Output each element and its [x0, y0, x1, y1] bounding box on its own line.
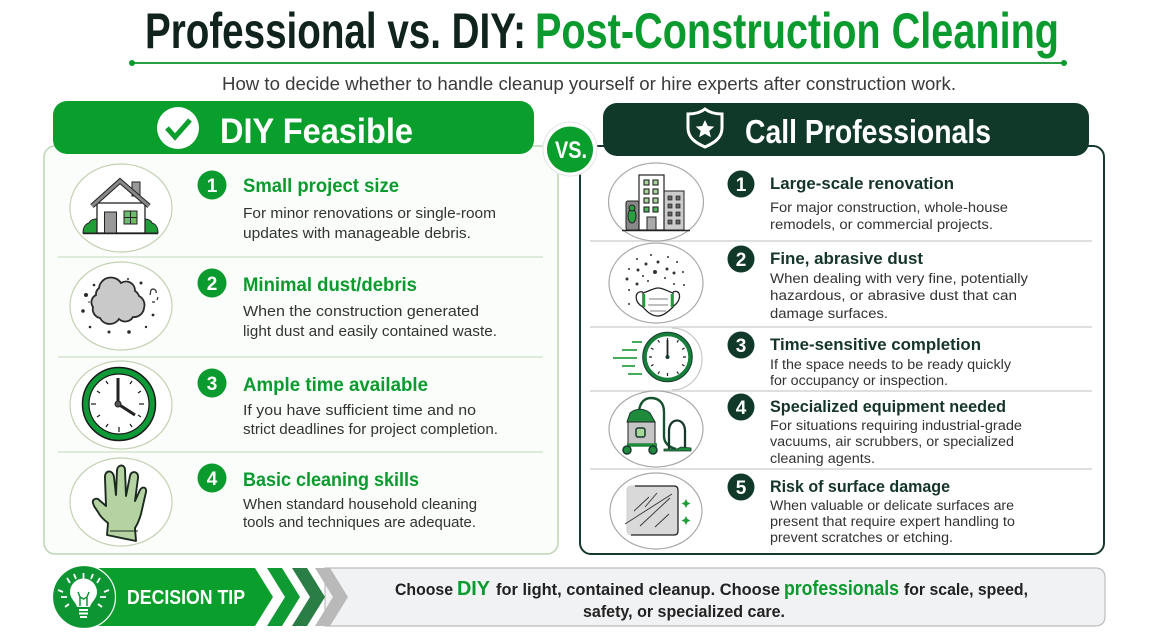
item 3: for occupancy or inspection.	[770, 373, 948, 388]
icon: buildings	[608, 163, 704, 241]
professionals header: Call Professionals	[745, 113, 991, 150]
item 3: 3	[207, 374, 217, 395]
VS badge	[543, 122, 597, 176]
icon: fast clock	[613, 328, 702, 390]
icon: vacuum	[609, 391, 703, 467]
title: Professional vs. DIY:	[145, 3, 526, 59]
item 3: Time-sensitive completion	[770, 335, 981, 354]
tip text: professionals	[784, 578, 899, 600]
icon: house	[70, 164, 172, 252]
icon: scratched surface	[610, 473, 702, 549]
item 5: Risk of surface damage	[770, 477, 950, 496]
item 3: If the space needs to be ready quickly	[770, 357, 1011, 372]
item 1	[198, 170, 496, 242]
icon: mask and dust	[609, 243, 703, 323]
DIY header: DIY Feasible	[220, 112, 413, 151]
decision tip bar	[52, 566, 1105, 628]
item 2: Fine, abrasive dust	[770, 249, 923, 268]
item 1: Small project size	[243, 176, 399, 197]
panel: call professionals	[580, 103, 1104, 554]
tip text: safety, or specialized care.	[583, 602, 785, 621]
item 3: If you have sufficient time and no	[243, 403, 476, 419]
item 4: Basic cleaning skills	[243, 470, 419, 491]
tip text: DIY	[457, 578, 491, 600]
item 5: prevent scratches or etching.	[770, 530, 953, 545]
item 5: When valuable or delicate surfaces are	[770, 498, 1014, 513]
item 4	[198, 464, 477, 531]
title underline	[129, 60, 1067, 66]
professionals header	[603, 103, 1089, 156]
item 2: When dealing with very fine, potentially	[770, 271, 1028, 286]
item 1: For major construction, whole-house	[770, 200, 1008, 215]
item 4: 4	[207, 469, 218, 490]
tip text: Choose	[395, 580, 453, 599]
item 1: 1	[736, 175, 747, 196]
item 1: Large-scale renovation	[770, 174, 954, 193]
item 5	[728, 474, 1015, 545]
item 1	[728, 170, 1008, 232]
icon: clock	[70, 361, 172, 449]
item 2	[728, 246, 1028, 321]
tip text: for scale, speed,	[904, 580, 1028, 599]
item 1: 1	[207, 176, 218, 197]
icon: light bulb	[52, 566, 116, 628]
tip text: for light, contained cleanup. Choose	[496, 580, 780, 599]
tip banner	[90, 568, 348, 626]
item 4: vacuums, air scrubbers, or specialized	[770, 434, 1014, 449]
item 4: cleaning agents.	[770, 451, 875, 466]
item 1: remodels, or commercial projects.	[770, 217, 993, 232]
item 2: 2	[736, 250, 746, 271]
item 2: light dust and easily contained waste.	[243, 324, 497, 340]
subtitle: How to decide whether to handle cleanup yourself or hire experts after construction work.	[222, 74, 956, 94]
icon: dust cloud	[70, 262, 172, 350]
panel: DIY feasible	[44, 101, 558, 554]
item 3: strict deadlines for project completion.	[243, 422, 498, 438]
item 2: When the construction generated	[243, 304, 479, 320]
item 5: present that require expert handling to	[770, 514, 1015, 529]
item 4: 4	[736, 398, 747, 419]
item 3: Ample time available	[243, 375, 428, 396]
item 2: damage surfaces.	[770, 306, 888, 321]
item 5: 5	[736, 478, 747, 499]
item 4: tools and techniques are adequate.	[243, 515, 476, 531]
item 1: updates with manageable debris.	[243, 226, 471, 242]
item 3: 3	[736, 336, 746, 357]
item 4: Specialized equipment needed	[770, 397, 1006, 416]
item 3	[198, 368, 498, 438]
item 4: When standard household cleaning	[243, 497, 477, 513]
item 3	[728, 332, 1011, 388]
title	[145, 3, 1059, 59]
tip banner: DECISION TIP	[127, 587, 245, 609]
item 2	[198, 268, 497, 340]
icon: glove	[70, 458, 172, 546]
item 4	[728, 394, 1022, 466]
tip text	[395, 578, 1028, 621]
item 2: hazardous, or abrasive dust that can	[770, 288, 1017, 303]
item 2: Minimal dust/debris	[243, 275, 417, 296]
item 4: For situations requiring industrial-grade	[770, 418, 1022, 433]
item 1: For minor renovations or single-room	[243, 206, 496, 222]
VS badge: VS.	[555, 137, 587, 164]
item 2: 2	[207, 274, 217, 295]
DIY header	[53, 101, 534, 154]
